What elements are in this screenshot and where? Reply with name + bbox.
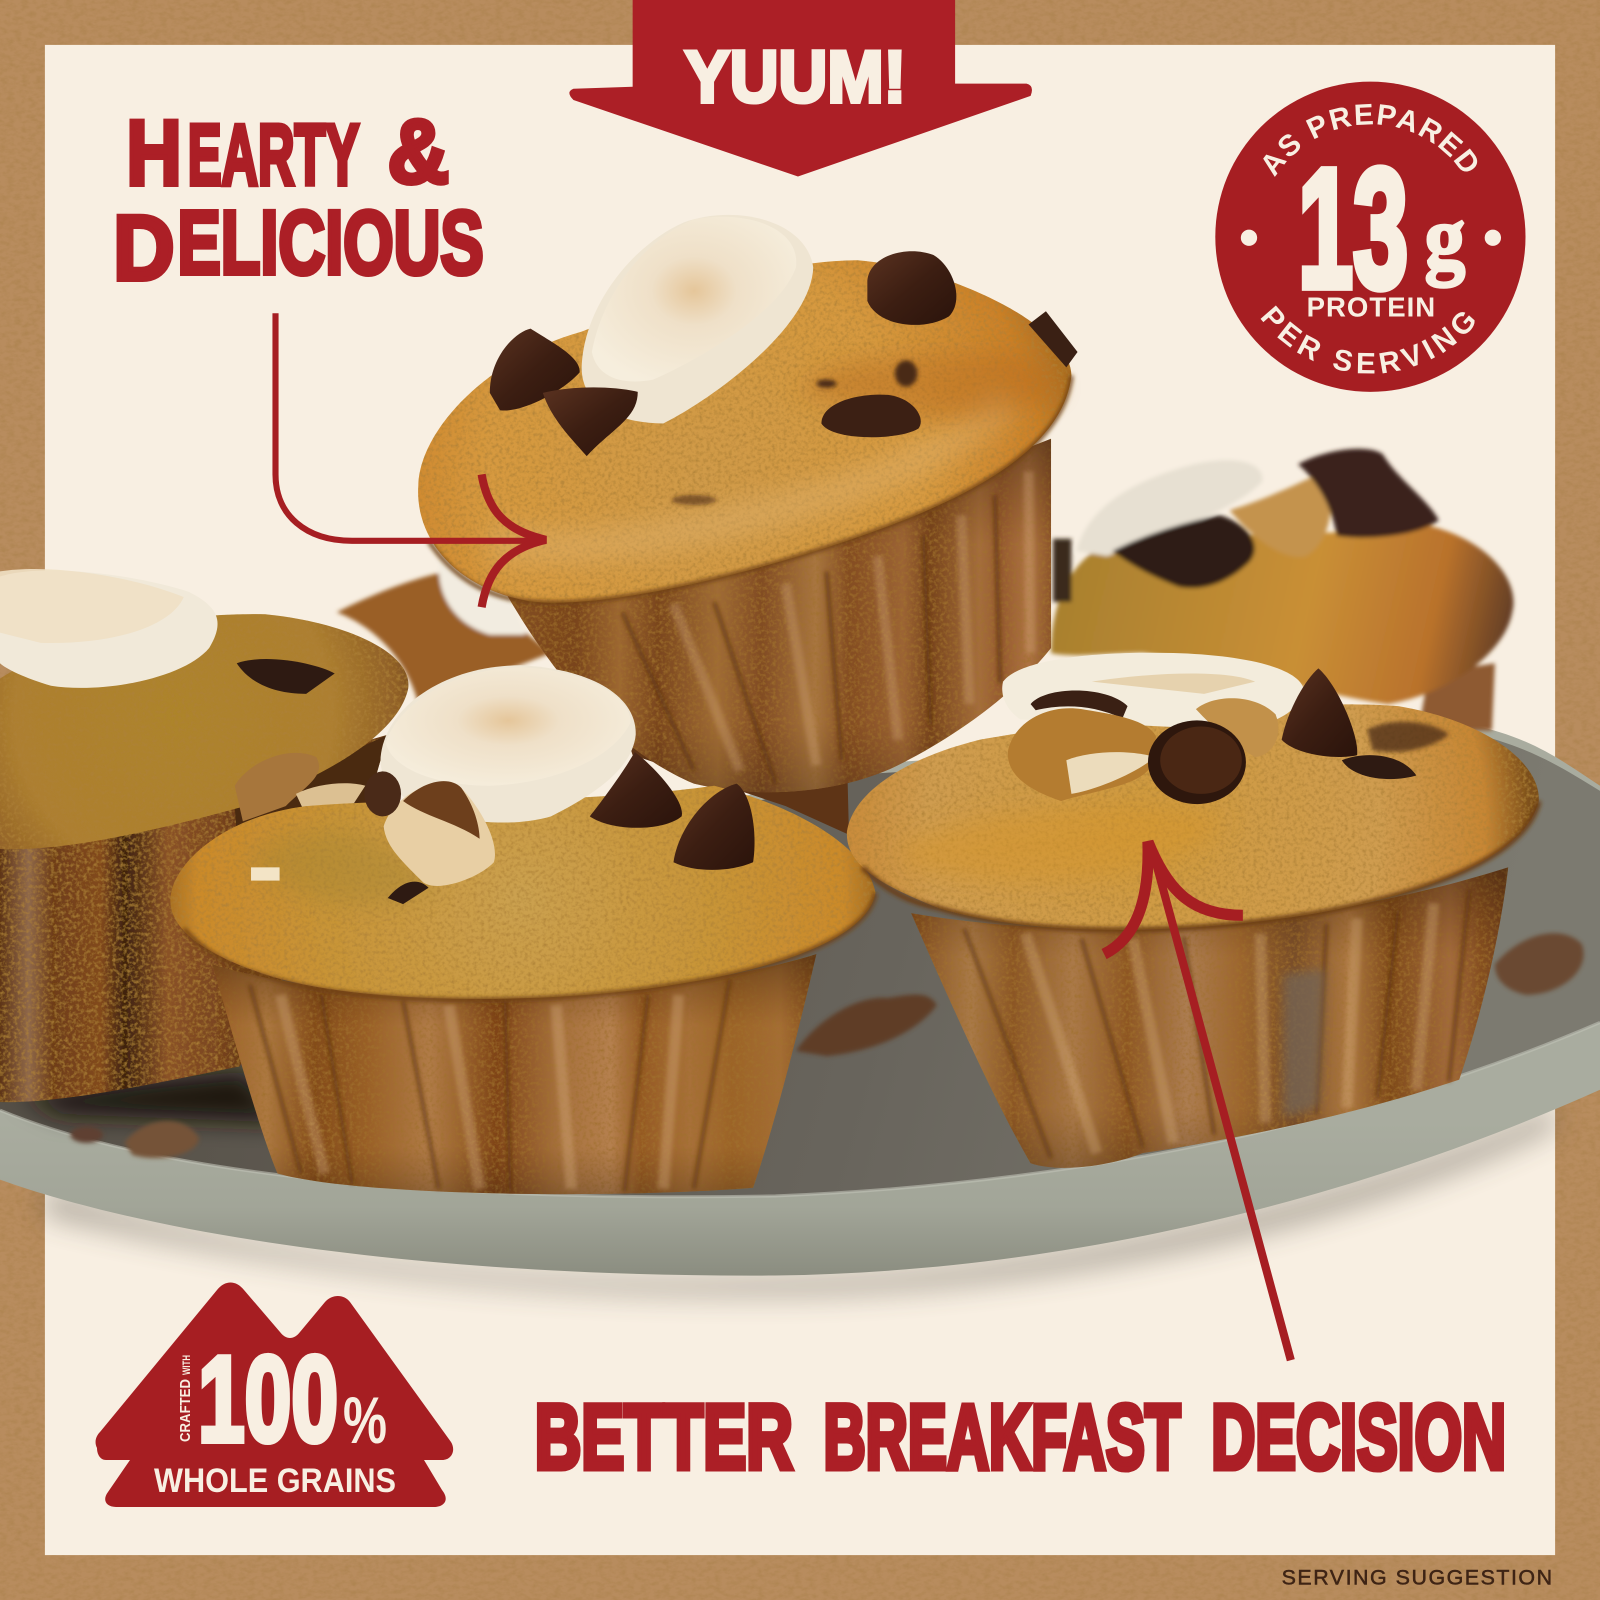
badge: 13g protein: [1215, 82, 1526, 392]
plate: [0, 724, 1600, 1294]
walnut: [1230, 471, 1331, 557]
muffin: front right: [847, 653, 1539, 1168]
chocolate chip: [543, 387, 638, 456]
char marks: [1367, 722, 1449, 752]
banana slice: [1002, 653, 1304, 730]
chocolate chip: [1282, 668, 1357, 757]
chocolate chip: [490, 329, 580, 411]
banana slice: [0, 571, 218, 688]
protein label: PROTEIN: [1307, 291, 1436, 322]
banana slice: [582, 215, 813, 423]
walnut: [384, 783, 495, 886]
grey wrapper patch: [1284, 969, 1324, 1117]
chocolate chip: [1029, 311, 1078, 367]
heading: Better Breakfast Decision: BREAKFAST: [823, 1386, 1181, 1488]
charred top edge: [796, 352, 1061, 418]
percent: %: [343, 1383, 387, 1457]
arrow: to top muffin: [276, 313, 546, 607]
walnut: [235, 753, 319, 821]
banana slice: [381, 665, 636, 823]
serving suggestion note: SERVING SUGGESTION: [1282, 1566, 1552, 1590]
golden patch: [898, 806, 1224, 881]
chocolate chip flat: [1031, 691, 1128, 718]
chocolate chip: [590, 752, 682, 828]
char spots: [671, 360, 917, 505]
dome lower edge: [862, 801, 1539, 930]
muffin: top: [418, 215, 1078, 835]
muffin: left: [0, 569, 408, 1102]
chocolate chip: [673, 784, 755, 870]
wrapper: [0, 735, 388, 1102]
pleats: [250, 980, 730, 1192]
muffin: front centre: [170, 665, 876, 1194]
dome: [418, 260, 1071, 603]
heading: Better Breakfast Decision: [535, 1386, 1506, 1488]
unit: g: [1424, 188, 1465, 287]
100: 100: [198, 1331, 338, 1467]
dome lower edge: [184, 893, 876, 1000]
crumb: [251, 867, 280, 881]
badge: 100% whole grains: [96, 1282, 453, 1507]
wrapper: [911, 867, 1508, 1168]
dome: [847, 704, 1539, 930]
crumbs on plate: [70, 933, 1584, 1158]
muffin: behind: [337, 556, 551, 704]
pleats: [964, 890, 1469, 1158]
chocolate chip: [867, 251, 956, 325]
backing under wrapper: [612, 694, 849, 835]
muffin: back right (blurred): [1051, 449, 1514, 731]
wrapper: [505, 439, 1051, 792]
pleats: [622, 471, 1031, 784]
whole grains: WHOLE GRAINS: [154, 1462, 396, 1500]
chocolate chunk: [1112, 515, 1255, 588]
arrow: to front right muffin: [1104, 842, 1291, 1360]
crafted with: CRAFTED: [177, 1379, 194, 1442]
banana slice, back muffin: [1077, 460, 1262, 556]
heading: Hearty & Delicious: &: [388, 103, 449, 203]
heading: Hearty & Delicious: [113, 103, 484, 300]
lighter crust band: [490, 398, 1010, 547]
banner: YUUM!: [569, 0, 1032, 177]
walnut: [1008, 708, 1156, 801]
walnut: [1196, 698, 1278, 757]
heading: Better Breakfast Decision: BETTER: [535, 1386, 793, 1488]
wrapper: [212, 954, 816, 1194]
curved text: per serving: PER SERVING: [1260, 306, 1475, 374]
olive shading near toppings: [245, 830, 439, 905]
chocolate chip round: [1148, 720, 1246, 804]
heading: Hearty & Delicious: D: [113, 198, 174, 300]
big number: 13: [1298, 134, 1408, 323]
heading: Hearty & Delicious: H: [127, 103, 182, 205]
curved text: as prepared: AS PREPARED: [1263, 104, 1478, 177]
dots: [1241, 230, 1501, 246]
banner text: YUUM!: [685, 35, 906, 118]
chocolate top: [1298, 449, 1439, 538]
crafted with: WITH: [181, 1355, 193, 1375]
dome lower edge: [429, 376, 1071, 603]
heading: Hearty & Delicious: EARTY: [188, 107, 359, 204]
dome: [0, 614, 408, 849]
heading: Hearty & Delicious: ELICIOUS: [178, 193, 484, 293]
chocolate chip: [821, 395, 921, 437]
dome: [170, 786, 876, 999]
banana sliver: [439, 556, 526, 635]
